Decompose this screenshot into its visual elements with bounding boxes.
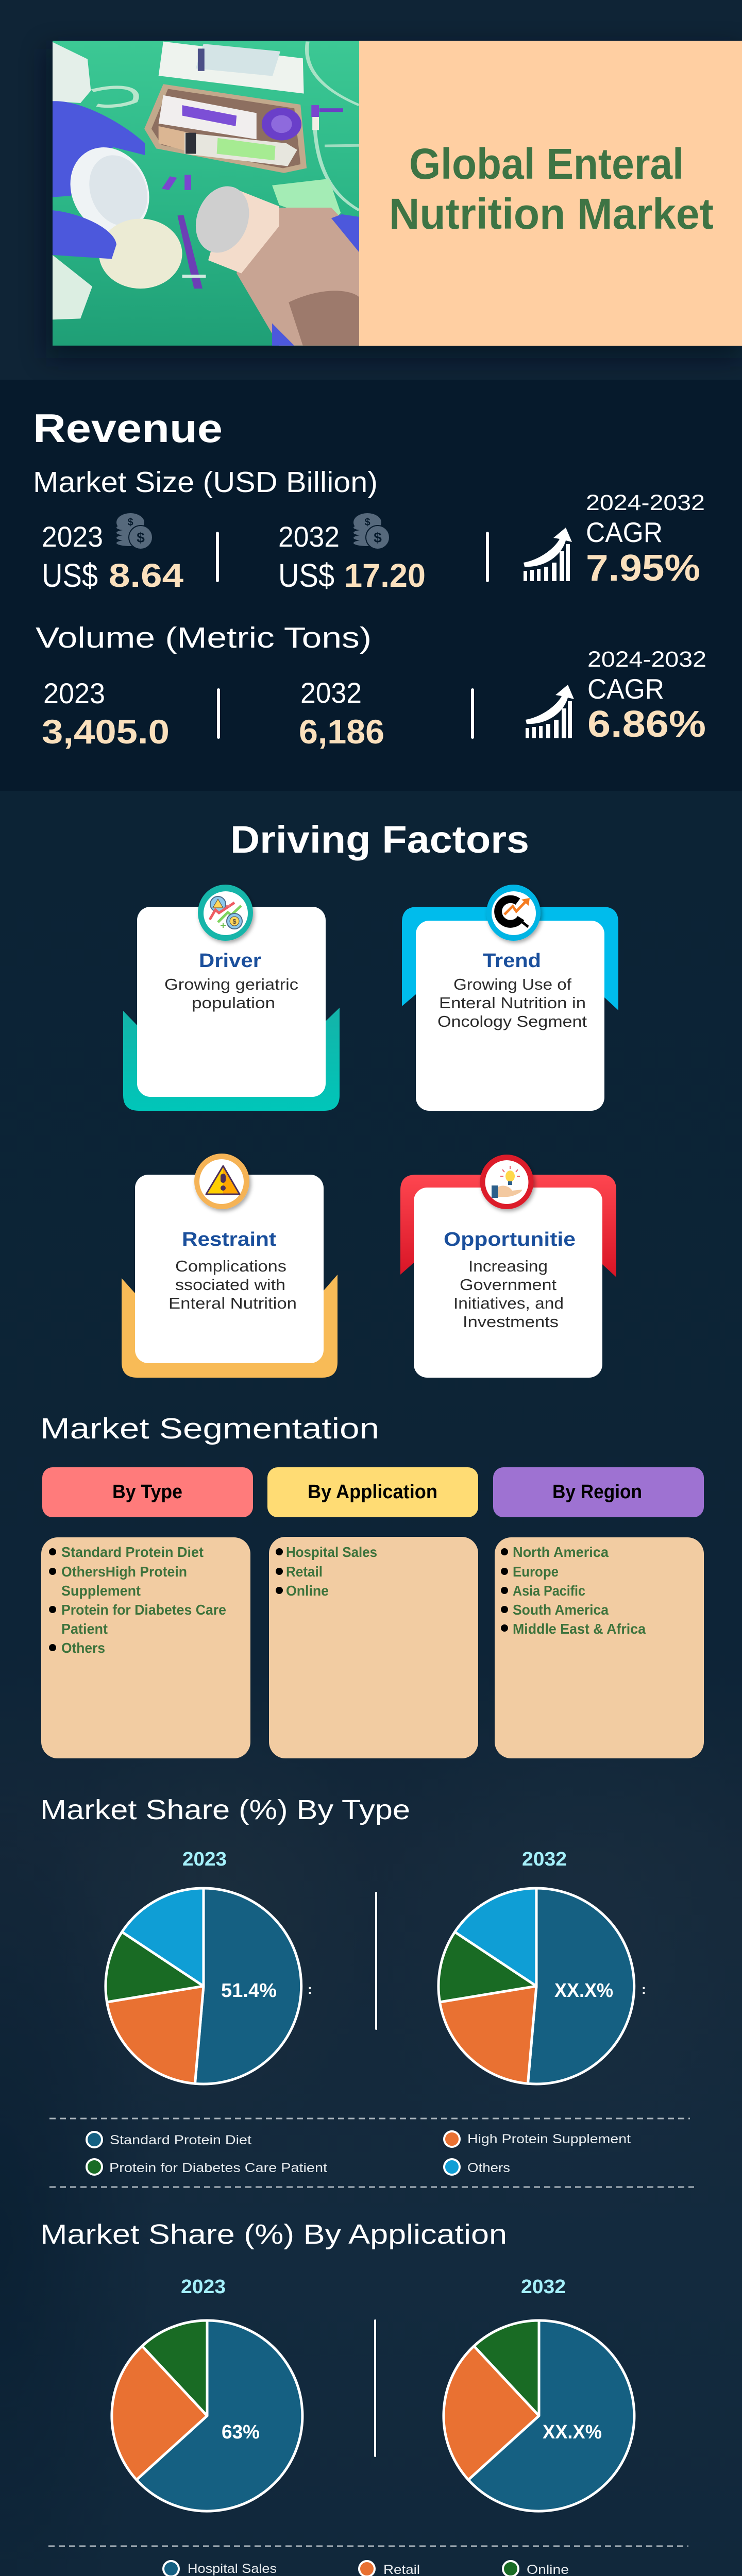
market segmentation section — [40, 1412, 704, 1758]
stat: 2023 volume — [42, 677, 170, 751]
legend: type: Others — [467, 2161, 510, 2175]
card text — [168, 1257, 297, 1312]
section: driving factors and segmentation — [40, 818, 704, 1758]
pie value: 63% — [222, 2421, 260, 2443]
header: by region: By Region — [552, 1481, 642, 1503]
section: hero and revenue — [33, 41, 742, 751]
title: Global Enteral — [409, 140, 684, 188]
stat: 2032 volume: 2032 — [300, 676, 362, 709]
heading: share by application: Market Share (%) By Application — [40, 2219, 507, 2250]
heading: driving factors: Driving Factors — [230, 818, 529, 861]
icon: driver — [198, 885, 253, 941]
heading: revenue: Revenue — [33, 405, 223, 451]
card text: Enteral Nutrition — [168, 1294, 297, 1312]
card text: Government — [460, 1276, 556, 1294]
divider — [471, 688, 474, 739]
card text: Investments — [463, 1313, 559, 1331]
header: by type — [42, 1467, 253, 1517]
panel: type list — [41, 1537, 250, 1758]
stat: revenue CAGR: 7.95% — [586, 548, 700, 589]
market share by type section — [40, 1794, 694, 2187]
stray colon mark: : — [642, 1981, 646, 1997]
heading: share by type: Market Share (%) By Type — [40, 1794, 410, 1825]
icon: growth arrow — [524, 528, 572, 581]
stat: revenue CAGR: CAGR — [586, 516, 663, 548]
panel: type list: Supplement — [61, 1583, 141, 1599]
legend: application — [48, 2546, 693, 2576]
stat: 2023 market size: 2023 — [42, 520, 103, 553]
volume heading: Volume (Metric Tons) — [36, 621, 372, 654]
card: opportunity — [400, 1155, 616, 1378]
icon: coins: $ — [374, 530, 382, 546]
pie chart: type 2023 — [106, 1888, 301, 2084]
header: by application: By Application — [308, 1481, 437, 1503]
card title: Restraint — [182, 1229, 276, 1250]
panel: region list: Middle East & Africa — [513, 1621, 646, 1637]
panel: region list: Asia Pacific — [513, 1583, 585, 1599]
pie value: 51.4% — [221, 1980, 277, 2002]
stat: 2023 volume: 2023 — [43, 677, 105, 709]
pie value: XX.X% — [543, 2421, 602, 2443]
divider — [216, 532, 219, 582]
card text — [164, 975, 298, 1012]
panel: type list: OthersHigh Protein — [61, 1564, 187, 1580]
divider — [217, 688, 220, 739]
year label 2023: 2023 — [181, 2276, 226, 2298]
market size heading: Market Size (USD Billion) — [33, 466, 378, 499]
card text: Increasing — [468, 1257, 548, 1275]
divider — [375, 1892, 377, 2030]
stat: 2032 volume: 6,186 — [299, 713, 384, 751]
card text: Initiatives, and — [453, 1294, 564, 1312]
panel: type list: Patient — [61, 1621, 108, 1637]
divider — [486, 532, 489, 582]
card title: Driver — [199, 950, 261, 972]
icon: coins: $ — [364, 517, 370, 528]
legend: type: Standard Protein Diet — [110, 2133, 251, 2147]
card text: Oncology Segment — [437, 1012, 587, 1030]
pie chart: type 2032 — [439, 1888, 634, 2084]
legend: type — [49, 2119, 694, 2187]
card text: Enteral Nutrition in — [439, 994, 586, 1012]
panel: application list: Retail — [286, 1564, 323, 1580]
card title: Trend — [483, 950, 541, 972]
pie value: XX.X% — [554, 1980, 613, 2002]
icon: coins: $ — [137, 530, 145, 546]
icon: coins — [116, 513, 153, 549]
panel: region list: North America — [513, 1544, 609, 1560]
stat: 2032 market size: US$ — [278, 557, 334, 594]
panel: region list — [495, 1537, 704, 1758]
card: trend — [402, 885, 618, 1111]
panel: region list: South America — [513, 1602, 609, 1618]
panel: application list: Online — [286, 1583, 329, 1599]
stat: 2032 market size: 2032 — [278, 520, 340, 553]
market share by application section — [40, 2219, 693, 2576]
card text — [437, 975, 587, 1030]
panel: region list: Europe — [513, 1564, 559, 1580]
panel: type list: Standard Protein Diet — [61, 1544, 204, 1560]
pie chart: application 2023 — [112, 2320, 302, 2511]
stat: 2032 market size — [278, 520, 426, 594]
stat: 2023 market size: 8.64 — [109, 557, 183, 594]
panel: application list — [269, 1537, 478, 1758]
stat: 2032 market size: 17.20 — [344, 557, 426, 594]
title: Nutrition Market — [389, 190, 714, 238]
icon: driver: $ — [232, 918, 237, 925]
stat: volume CAGR: 6.86% — [587, 704, 706, 745]
header: by region — [493, 1467, 704, 1517]
revenue section — [33, 405, 706, 751]
pie chart: application 2032 — [444, 2320, 634, 2511]
card text: Growing Use of — [453, 975, 571, 993]
hero shadow — [46, 49, 742, 358]
section: market share charts — [40, 1794, 694, 2576]
driving factors section — [122, 818, 618, 1378]
stat: volume CAGR: 2024-2032 — [587, 647, 706, 672]
card text: Complications — [175, 1257, 286, 1275]
stat: revenue CAGR: 2024-2032 — [586, 490, 705, 515]
divider — [374, 2319, 376, 2457]
hero banner — [53, 41, 742, 346]
card text: ssociated with — [175, 1276, 285, 1294]
card: restraint — [122, 1154, 338, 1378]
heading: market segmentation: Market Segmentation — [40, 1412, 379, 1445]
legend: application: Hospital Sales — [188, 2562, 277, 2576]
card text: population — [192, 994, 275, 1012]
title panel — [359, 41, 742, 346]
panel: application list: Hospital Sales — [286, 1544, 377, 1560]
stat: 2032 volume — [299, 676, 384, 751]
card text — [453, 1257, 564, 1331]
panel: type list: Protein for Diabetes Care — [61, 1602, 226, 1618]
stat: volume CAGR: CAGR — [587, 673, 664, 705]
panel: type list: Others — [61, 1640, 105, 1656]
hero photo: enteral feeding kit — [53, 41, 359, 346]
year label 2032: 2032 — [522, 1849, 567, 1870]
icon: coins: $ — [127, 517, 133, 528]
icon: trend — [486, 885, 541, 941]
header: by type: By Type — [112, 1481, 182, 1503]
card: driver — [123, 885, 340, 1111]
card title: Opportunitie — [444, 1229, 576, 1250]
icon: opportunity — [480, 1155, 534, 1209]
stat: 2023 volume: 3,405.0 — [42, 713, 170, 751]
legend: type: Protein for Diabetes Care Patient — [109, 2161, 327, 2175]
icon: growth arrow — [526, 685, 574, 738]
year label 2032: 2032 — [521, 2276, 566, 2298]
card text: Growing geriatric — [164, 975, 298, 993]
stat: revenue CAGR — [586, 490, 705, 589]
legend: type: High Protein Supplement — [467, 2132, 631, 2146]
header: by application — [267, 1467, 478, 1517]
stray colon mark: : — [308, 1981, 312, 1997]
title — [389, 140, 714, 238]
stat: 2023 market size — [42, 520, 183, 594]
year label 2023: 2023 — [182, 1849, 227, 1870]
stat: volume CAGR — [587, 647, 706, 745]
icon: coins — [353, 513, 390, 549]
stat: 2023 market size: US$ — [42, 557, 98, 594]
icon: restraint warning — [194, 1154, 249, 1209]
